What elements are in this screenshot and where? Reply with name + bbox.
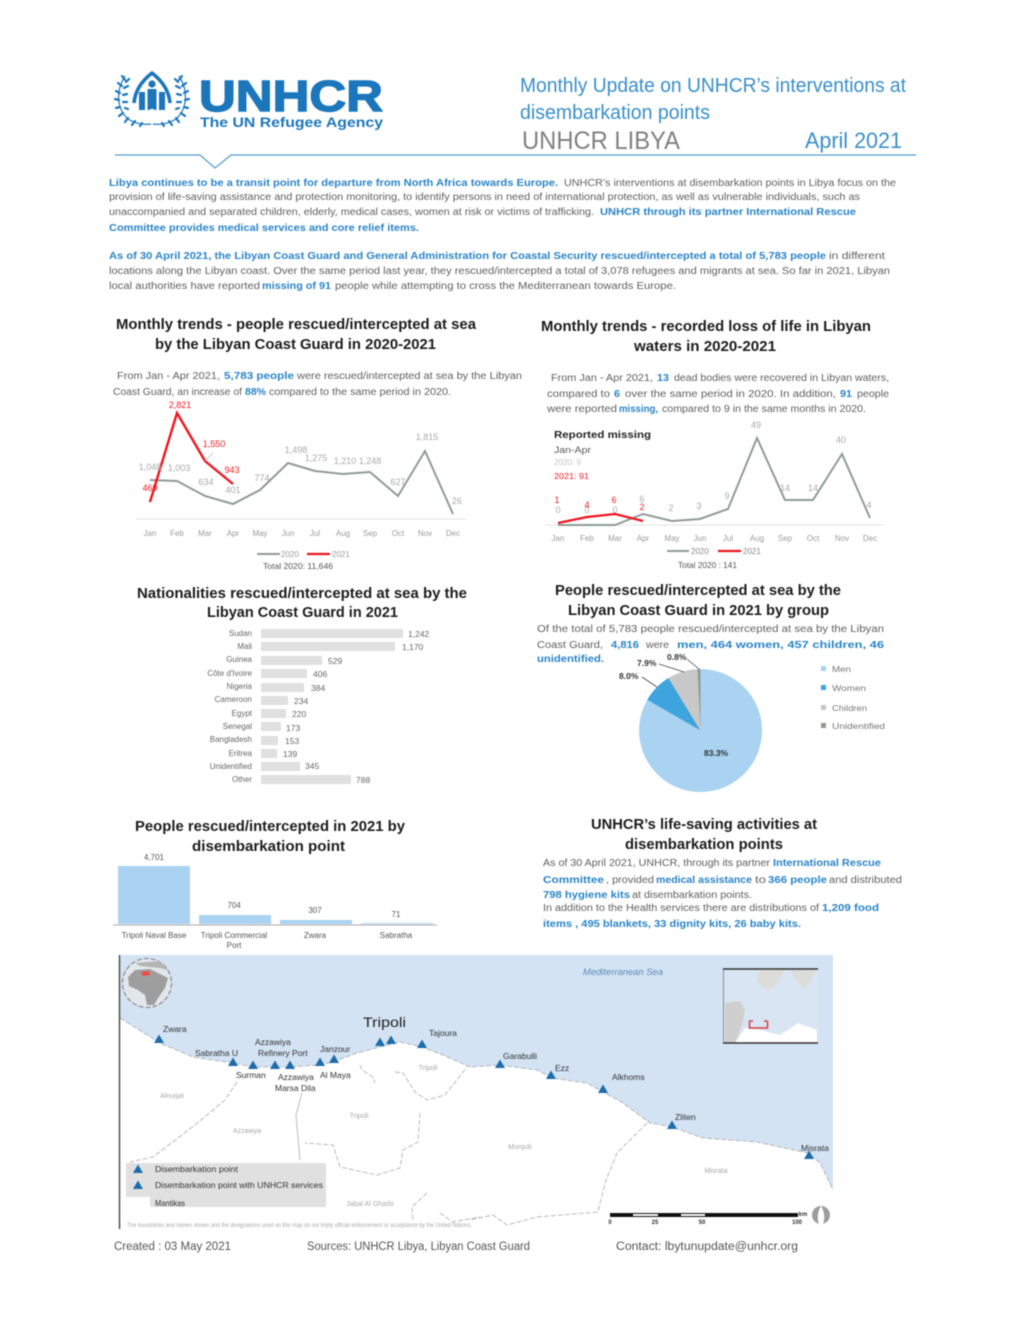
callout: reported missing: Jan-Apr xyxy=(554,445,591,455)
pie legend xyxy=(821,664,885,731)
bar values: 220 xyxy=(292,709,306,719)
text: by group summary: men, 464 women, 457 children, 46 xyxy=(677,640,885,651)
district labels: Tripoli xyxy=(419,1065,438,1072)
scale bar: 50 xyxy=(699,1220,706,1226)
month axis: Dec xyxy=(863,534,877,543)
text: loss of life summary: dead bodies were recovered in Libyan waters, xyxy=(674,373,889,384)
text: loss of life summary: From Jan - Apr 2021, xyxy=(551,373,653,384)
month axis xyxy=(552,534,877,543)
bar labels: Sabratha xyxy=(380,931,413,940)
text: life-saving activities: items , 495 blankets, 33 dignity kits, 26 baby kits. xyxy=(543,919,801,930)
bar values xyxy=(144,853,401,919)
pie labels xyxy=(619,652,729,758)
intro paragraph 1 xyxy=(109,178,896,234)
values 2021 xyxy=(142,400,240,493)
values 2020: 627 xyxy=(390,477,406,487)
line chart: missing and dead by month xyxy=(545,420,884,570)
bar values: 173 xyxy=(286,723,300,733)
month axis: Mar xyxy=(608,534,622,543)
heading: by group: Libyan Coast Guard in 2021 by group xyxy=(568,603,829,619)
bar values: 704 xyxy=(227,901,241,910)
pie labels: 8.0% xyxy=(619,671,639,681)
values 2021: 6 xyxy=(611,495,617,505)
values 2021: 943 xyxy=(224,465,240,475)
report title: Monthly Update on UNHCR’s interventions at xyxy=(520,75,906,97)
values 2020: 774 xyxy=(254,473,270,483)
bar chart: by disembarkation point xyxy=(113,853,437,950)
month axis: Aug xyxy=(336,529,350,538)
sea xyxy=(120,955,833,1190)
month axis: Jan xyxy=(552,534,564,543)
place labels: Tajoura xyxy=(429,1028,457,1038)
district labels: Misrata xyxy=(705,1168,728,1175)
month axis: Dec xyxy=(446,529,460,538)
scale bar xyxy=(608,1212,807,1226)
intro paragraph 1: Committee provides medical services and core relief items. xyxy=(109,223,419,234)
values 2020: 401 xyxy=(225,485,241,495)
logo wordmark: UNHCR xyxy=(199,72,383,121)
pie labels: 7.9% xyxy=(637,658,657,668)
text: loss of life summary: were reported xyxy=(546,404,617,415)
bar values: 345 xyxy=(305,761,319,771)
values 2020: 1,210 xyxy=(334,456,356,466)
legend xyxy=(667,547,761,570)
text: loss of life summary: 91 xyxy=(840,389,852,400)
country labels: Senegal xyxy=(223,722,252,731)
scale bar: km xyxy=(799,1212,807,1218)
district labels xyxy=(160,1065,728,1208)
pie labels: 0.8% xyxy=(667,652,687,662)
place labels: Al Maya xyxy=(320,1070,351,1080)
intro paragraph 2: As of 30 April 2021, the Libyan Coast Guard and General Administration for Coastal Security rescued/intercepted a total of 5,783 people xyxy=(109,251,826,262)
text: life-saving activities: at disembarkation points. xyxy=(632,890,752,901)
text: loss of life summary: people xyxy=(857,389,889,400)
bar values: 529 xyxy=(328,656,342,666)
month axis: Oct xyxy=(807,534,820,543)
text: by group summary: 4,816 xyxy=(611,640,639,651)
text: loss of life summary: compared to xyxy=(547,389,610,400)
text: life-saving activities xyxy=(543,858,902,930)
intro paragraph 2: in different xyxy=(829,251,885,262)
subtitle: office: UNHCR LIBYA xyxy=(522,127,680,155)
text: life-saving activities: International Rescue xyxy=(773,858,881,869)
district labels: Murqub xyxy=(508,1144,532,1151)
month axis: Nov xyxy=(418,529,432,538)
heading: by group: People rescued/intercepted at sea by the xyxy=(555,583,841,599)
bar values: 71 xyxy=(392,910,401,919)
month axis: Apr xyxy=(227,529,240,538)
footer: created: Created : 03 May 2021 xyxy=(114,1241,231,1253)
country labels: Eritrea xyxy=(228,749,253,758)
place labels: Tripoli xyxy=(363,1014,406,1030)
legend: Total 2020: 11,646 xyxy=(263,562,334,571)
heading: nationalities xyxy=(137,586,467,621)
heading: by disembarkation point: People rescued/intercepted in 2021 by xyxy=(135,819,405,835)
pie legend: Women xyxy=(832,683,866,693)
pie legend: Children xyxy=(832,703,867,713)
values 2020: 1,815 xyxy=(416,432,438,442)
text: life-saving activities: As of 30 April 2021, UNHCR, through its partner xyxy=(543,858,771,869)
values 2020: 0 xyxy=(555,505,561,515)
legend: 2020 xyxy=(281,550,299,559)
text: rescued trends summary: 5,783 people xyxy=(224,371,295,382)
month axis: Mar xyxy=(198,529,212,538)
values 2020: 1,248 xyxy=(359,456,381,466)
callout: reported missing: 2020: 9 xyxy=(554,457,581,467)
district labels: Tripoli xyxy=(350,1113,369,1120)
slice: women xyxy=(647,678,700,730)
icon: olive wreath and sheltering hands xyxy=(115,73,189,126)
coastline xyxy=(120,1018,833,1190)
place labels: Surman xyxy=(236,1070,266,1080)
values 2020 xyxy=(139,432,462,506)
map disclaimer: The boundaries and names shown and the designations used on this map do not imply official endorsement or acceptance by the United Nations. xyxy=(127,1223,472,1229)
text: by group summary xyxy=(537,624,885,665)
country labels: Egypt xyxy=(232,709,253,718)
slice: children xyxy=(668,669,700,730)
text: life-saving activities: In addition to the Health services there are distributions of xyxy=(543,903,819,914)
callout: reported missing: 2021: 91 xyxy=(554,471,589,481)
country labels: Sudan xyxy=(229,629,252,638)
text: loss of life summary: missing, xyxy=(619,404,658,415)
values 2020: 49 xyxy=(751,420,761,430)
bar values: 1,242 xyxy=(408,629,430,639)
text: life-saving activities: 366 people xyxy=(768,875,827,886)
values 2020: 9 xyxy=(724,491,730,501)
bar values: 153 xyxy=(285,736,299,746)
heading: loss of life xyxy=(541,319,871,355)
intro paragraph 1: UNHCR through its partner International Rescue xyxy=(600,207,856,218)
place labels: Zwara xyxy=(163,1024,187,1034)
footer: contact: Contact: lbytunupdate@unhcr.org xyxy=(616,1241,798,1253)
legend: 2021 xyxy=(743,547,761,556)
bar values: 4,701 xyxy=(144,853,165,862)
text: life-saving activities: medical assistance xyxy=(656,875,752,886)
text: rescued trends summary: From Jan - Apr 2021, xyxy=(117,371,220,382)
logo tagline: The UN Refugee Agency xyxy=(200,114,383,130)
slice: unidentified xyxy=(697,669,700,730)
text: life-saving activities: 1,209 food xyxy=(822,903,879,914)
values 2020: 2 xyxy=(668,503,674,513)
values 2020: 0 xyxy=(584,505,590,515)
bar labels: Port xyxy=(227,941,242,950)
text: loss of life summary xyxy=(546,373,889,415)
text: life-saving activities: Committee xyxy=(543,875,605,886)
intro paragraph 1: UNHCR’s interventions at disembarkation points in Libya focus on the xyxy=(564,178,896,189)
bars xyxy=(261,629,403,784)
values 2020: 40 xyxy=(836,435,846,445)
values 2020: 6 xyxy=(639,494,645,504)
text: by group summary: were xyxy=(645,640,669,651)
text: rescued trends summary: Coast Guard, an increase of xyxy=(113,387,242,398)
values 2020: 14 xyxy=(780,483,790,493)
month axis: Jun xyxy=(694,534,706,543)
text: life-saving activities: and distributed xyxy=(829,875,902,886)
values 2020: 1,275 xyxy=(305,453,327,463)
text: by group summary: Coast Guard, xyxy=(537,640,603,651)
bar values: 406 xyxy=(313,669,327,679)
text: rescued trends summary: were rescued/intercepted at sea by the Libyan xyxy=(296,371,522,382)
bar values: 139 xyxy=(283,749,297,759)
bar values: 788 xyxy=(356,775,370,785)
text: rescued trends summary: 88% xyxy=(245,387,266,398)
month axis: Feb xyxy=(580,534,594,543)
district boundaries xyxy=(130,1065,647,1225)
text: loss of life summary: over the same period in 2020. In addition, xyxy=(625,389,836,400)
map legend xyxy=(126,1163,326,1208)
month axis: Jul xyxy=(310,529,320,538)
map: Libya coast disembarkation points xyxy=(119,955,833,1230)
pie chart: by group xyxy=(619,652,885,792)
country labels: Other xyxy=(232,775,252,784)
legend: 2020 xyxy=(691,547,709,556)
heading: loss of life: waters in 2020-2021 xyxy=(633,339,776,355)
heading: by disembarkation point: disembarkation point xyxy=(192,839,345,855)
values 2020: 26 xyxy=(452,496,462,506)
month axis: Feb xyxy=(170,529,184,538)
legend: Total 2020 : 141 xyxy=(678,561,738,570)
text: loss of life summary: 13 xyxy=(657,373,669,384)
district labels: Alnuqat xyxy=(160,1093,184,1100)
intro paragraph 1: Libya continues to be a transit point for departure from North Africa towards Europe. xyxy=(109,178,558,189)
heading: life-saving activities: UNHCR’s life-saving activities at xyxy=(591,817,817,833)
heading: nationalities: Libyan Coast Guard in 2021 xyxy=(207,605,398,621)
heading: by group xyxy=(555,583,841,619)
scale bar: 0 xyxy=(608,1220,612,1226)
place labels: Refinery Port xyxy=(258,1048,308,1058)
disembarkation markers xyxy=(154,1034,814,1159)
text: rescued trends summary: compared to the same period in 2020. xyxy=(269,387,451,398)
place labels: Alkhoms xyxy=(612,1072,645,1082)
intro paragraph 1: provision of life-saving assistance and protection monitoring, to identify persons in need of international protection, as well as vulnerable individuals, such as xyxy=(109,192,860,203)
intro paragraph 2: local authorities have reported xyxy=(109,281,260,292)
values 2020: 14 xyxy=(808,483,818,493)
intro paragraph 2: people while attempting to cross the Mediterranean towards Europe. xyxy=(335,281,676,292)
series 2021 xyxy=(558,514,643,523)
month axis: Jan xyxy=(144,529,156,538)
line chart: people rescued/intercepted by month xyxy=(136,400,466,571)
map legend: Mantikas xyxy=(155,1198,185,1208)
heading: by disembarkation point xyxy=(135,819,405,855)
inset locator xyxy=(750,1021,768,1028)
series 2021 xyxy=(150,413,233,502)
report title: disembarkation points xyxy=(520,102,710,124)
values 2021: 1,550 xyxy=(203,439,225,449)
values 2020: 634 xyxy=(198,477,214,487)
map legend: Disembarkation point xyxy=(155,1164,239,1174)
country labels: Bangladesh xyxy=(210,735,252,744)
intro paragraph 2: locations along the Libyan coast. Over the same period last year, they rescued/intercepted a total of 3,078 refugees and migrants at sea. So far in 2021, Libyan xyxy=(109,266,890,277)
month axis: Sep xyxy=(363,529,378,538)
month axis: Aug xyxy=(750,534,764,543)
bar values: 384 xyxy=(311,683,325,693)
bar labels xyxy=(122,931,413,950)
footer: sources: Sources: UNHCR Libya, Libyan Coast Guard xyxy=(307,1241,530,1253)
heading: life-saving activities xyxy=(591,817,817,853)
month axis: Jun xyxy=(282,529,294,538)
bar values xyxy=(283,629,430,785)
values 2021 xyxy=(554,495,645,512)
text: loss of life summary: 6 xyxy=(614,389,620,400)
values 2021: 2,821 xyxy=(169,400,191,410)
place labels: Garabulli xyxy=(503,1051,537,1061)
legend xyxy=(257,550,350,571)
place labels: Janzour xyxy=(320,1044,350,1054)
UNHCR logo xyxy=(115,72,383,130)
text: loss of life summary: compared to 9 in the same months in 2020. xyxy=(662,404,866,415)
heading: rescued trends: by the Libyan Coast Guard in 2020-2021 xyxy=(155,337,436,353)
text: by group summary: Of the total of 5,783 people rescued/intercepted at sea by the Libyan xyxy=(537,624,884,635)
place labels: Azzawiya xyxy=(278,1072,314,1082)
heading: loss of life: Monthly trends - recorded loss of life in Libyan xyxy=(541,319,871,335)
bar values: 234 xyxy=(294,696,308,706)
place labels: Zliten xyxy=(675,1112,696,1122)
bar values: 1,170 xyxy=(402,642,424,652)
intro paragraph 1: unaccompanied and separated children, elderly, medical cases, women at risk or victims of trafficking. xyxy=(109,207,594,218)
text: by group summary: unidentified. xyxy=(537,654,604,665)
text: life-saving activities: to xyxy=(755,875,767,886)
values 2021: 2 xyxy=(639,502,645,512)
text: life-saving activities: , provided xyxy=(606,875,654,886)
values 2020: 1,003 xyxy=(168,463,190,473)
land background xyxy=(119,955,833,1230)
subtitle: date: April 2021 xyxy=(805,128,902,153)
district labels: Azzawya xyxy=(233,1128,261,1135)
report title xyxy=(520,75,906,155)
values 2020 xyxy=(555,420,872,515)
pie legend: Men xyxy=(832,664,851,674)
month axis: Sep xyxy=(778,534,793,543)
values 2021: 1 xyxy=(554,495,560,505)
district labels: Jabal Al Gharbi xyxy=(346,1201,394,1208)
month axis: May xyxy=(664,534,680,543)
values 2020: 0 xyxy=(612,505,618,515)
month axis: Apr xyxy=(637,534,650,543)
map legend: Disembarkation point with UNHCR services xyxy=(155,1180,323,1190)
place labels: Ezz xyxy=(555,1063,569,1073)
bar chart: nationalities xyxy=(207,629,430,785)
heading: life-saving activities: disembarkation points xyxy=(625,837,783,853)
country labels: Guinea xyxy=(226,655,253,664)
callout: reported missing xyxy=(554,429,651,481)
place labels: Sabratha U xyxy=(195,1048,238,1058)
month axis: Jul xyxy=(723,534,733,543)
values 2020: 1,498 xyxy=(285,445,307,455)
bar labels: Tripoli Naval Base xyxy=(122,931,187,940)
scale bar: 100 xyxy=(792,1220,803,1226)
country labels: Unidentified xyxy=(210,762,252,771)
globe locator xyxy=(122,958,172,1008)
series 2020 xyxy=(150,451,453,514)
values 2020: 3 xyxy=(696,501,702,511)
intro paragraph 2: missing of 91 xyxy=(262,281,331,292)
pie legend: Unidentified xyxy=(832,721,885,731)
scale bar: 25 xyxy=(652,1220,659,1226)
values 2020: 4 xyxy=(866,500,872,510)
month axis: Oct xyxy=(392,529,405,538)
slice: men xyxy=(639,669,762,792)
bar values: 307 xyxy=(308,906,322,915)
bar labels: Tripoli Commercial xyxy=(201,931,267,940)
north arrow xyxy=(812,1206,830,1224)
place labels: Azzawiya xyxy=(255,1037,291,1047)
place labels: Misrata xyxy=(801,1143,829,1153)
intro paragraph 2 xyxy=(109,251,890,292)
callout: reported missing: Reported missing xyxy=(554,429,651,441)
place labels xyxy=(163,1014,829,1153)
values 2021: 4 xyxy=(584,500,590,510)
place labels: Marsa Dila xyxy=(275,1083,316,1093)
country labels: Côte d'Ivoire xyxy=(207,669,253,678)
inset map xyxy=(723,969,818,1043)
series 2020 xyxy=(558,438,870,525)
values 2021: 469 xyxy=(142,483,158,493)
text: life-saving activities: 798 hygiene kits xyxy=(543,890,630,901)
values 2020: 1,048 xyxy=(139,462,161,472)
heading: nationalities: Nationalities rescued/intercepted at sea by the xyxy=(137,586,467,602)
country labels: Nigeria xyxy=(227,682,253,691)
pie labels: 83.3% xyxy=(704,748,729,758)
month axis xyxy=(144,529,460,538)
heading: rescued trends: Monthly trends - people rescued/intercepted at sea xyxy=(116,317,477,333)
text: rescued trends summary xyxy=(113,371,522,398)
bar labels: Zwara xyxy=(304,931,327,940)
month axis: May xyxy=(252,529,268,538)
heading: rescued trends xyxy=(116,317,477,353)
sea label: Mediterranean Sea xyxy=(583,967,663,978)
country labels: Cameroon xyxy=(215,695,252,704)
month axis: Nov xyxy=(835,534,849,543)
country labels: Mali xyxy=(237,642,252,651)
country labels xyxy=(207,629,253,784)
legend: 2021 xyxy=(332,550,350,559)
